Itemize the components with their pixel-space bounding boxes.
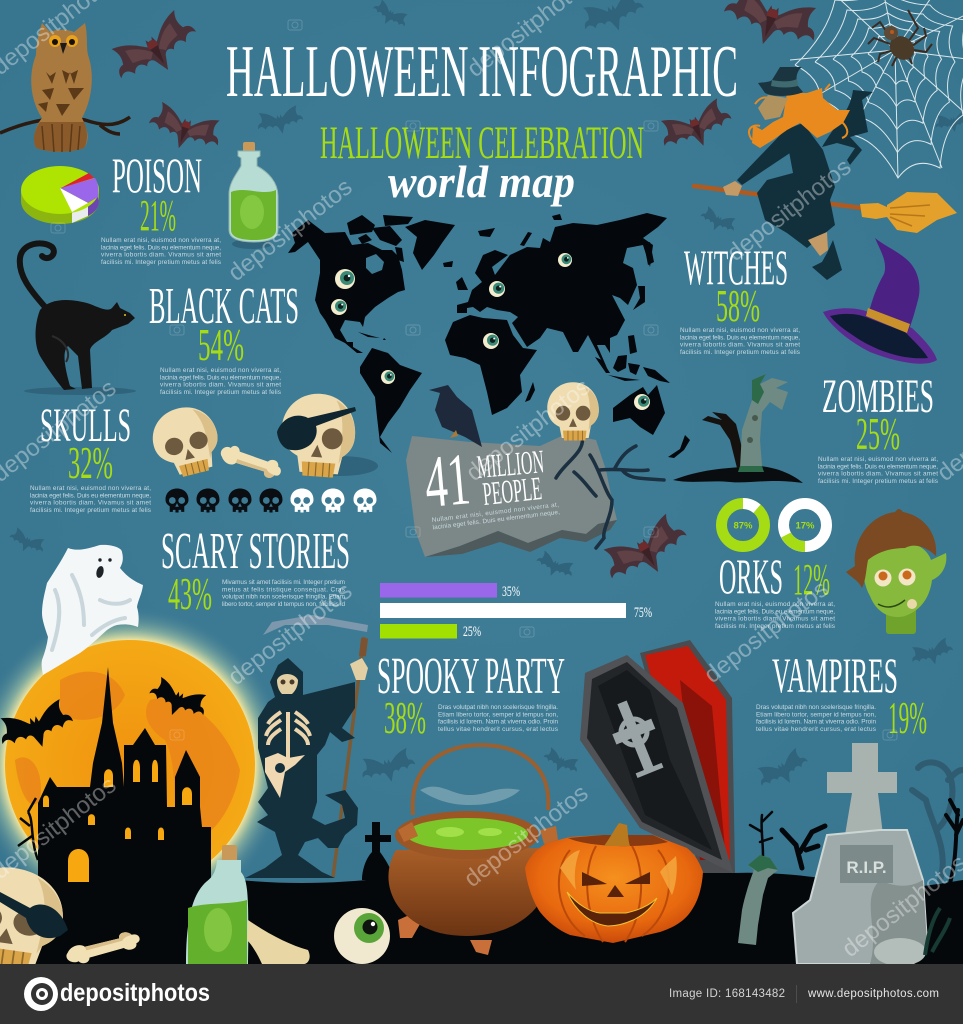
map: Africa <box>445 315 537 415</box>
scythe grip <box>359 638 368 656</box>
text block: volutpat nibh non scelerisque fringilla. Etiam <box>222 594 345 601</box>
text block: Mivamus sit amet facilisis mi. Integer pretium <box>222 579 345 586</box>
text block: metus at felis tristique consequat. Cras <box>222 586 345 593</box>
text block: lacinia eget felis. Duis eu elementum neque, <box>818 463 938 470</box>
text block: viverra lobortis diam. Vivamus sit amet <box>680 342 800 349</box>
subtitle: world map: world map <box>388 156 575 207</box>
map: New Zealand <box>668 435 690 458</box>
text block <box>222 579 345 608</box>
bar: 75% <box>380 603 626 618</box>
text block: Dras volutpat nibh non scelerisque fringilla. <box>438 704 558 711</box>
stone <box>406 434 617 557</box>
text block: viverra lobortis diam. Vivamus sit amet <box>818 471 938 478</box>
section: skulls <box>30 399 151 514</box>
donut chart: 87% <box>722 504 764 546</box>
text block: libero tortor, semper id tempus non, facilisis id <box>222 601 345 608</box>
icon: raven <box>429 385 482 447</box>
icon row: seven skulls <box>166 489 376 512</box>
icon: rip tombstone <box>793 743 950 966</box>
icon: black cat <box>20 243 136 395</box>
text block: facilisis mi. Integer pretium metus at felis <box>30 507 151 514</box>
text block: facilisis mi. Integer pretium metus at felis <box>101 259 221 266</box>
icon: witch on broom <box>694 67 957 280</box>
cauldron handle <box>413 745 548 815</box>
reaper face <box>277 674 298 694</box>
section: witches <box>680 239 800 356</box>
percent: 25%: 25% <box>856 409 900 459</box>
broom binding <box>860 203 887 219</box>
witch boot <box>812 240 842 280</box>
brown bats <box>106 0 823 593</box>
scythe blade <box>263 615 368 635</box>
footer bar <box>0 964 963 1024</box>
watermarks: depositphotos <box>223 577 357 691</box>
icon: dead trees <box>750 762 963 890</box>
text block <box>101 237 221 266</box>
map: Eurasia <box>457 213 667 368</box>
reaper cloak <box>245 658 358 878</box>
world map <box>288 213 690 458</box>
text: BLACK CATS <box>149 278 299 335</box>
icon: skull with eye patch <box>0 861 69 973</box>
text block: viverra lobortis diam. Vivamus sit amet <box>30 500 151 507</box>
watermarks: depositphotos <box>223 173 357 287</box>
map: Hudson Bay <box>366 254 384 274</box>
witch body and skirt <box>757 123 835 248</box>
section: witches: WITCHES <box>684 239 788 295</box>
section: orks: 12% <box>793 555 830 604</box>
text block: Dras volutpat nibh non scelerisque fringilla. <box>756 704 876 711</box>
map: Svalbard and Novaya Zemlya <box>478 214 562 246</box>
pumpkin top shade <box>568 835 668 846</box>
text block <box>715 601 835 630</box>
scythe pole <box>333 637 364 877</box>
broom bristles <box>887 192 957 233</box>
text block: lacinia eget felis. Duis eu elementum neque, <box>101 244 221 251</box>
witch hair <box>752 88 850 148</box>
section: poison: 21% <box>140 191 176 240</box>
tombstone body <box>793 830 927 964</box>
text block: viverra lobortis diam. Vivamus sit amet <box>715 616 835 623</box>
stone at base <box>874 938 926 966</box>
icon: skull on stone <box>547 382 599 441</box>
pumpkin body <box>525 835 703 943</box>
text block: Nullam erat nisi, euismod non viverra at, <box>30 485 151 492</box>
icon: zombie hands rising <box>673 374 803 483</box>
pumpkin eyes <box>582 872 650 886</box>
bar: 25% <box>380 624 457 638</box>
tombstone cross <box>827 743 897 835</box>
heading: skulls: SKULLS <box>40 399 131 452</box>
tombstone label: r.i.p.: R.I.P. <box>846 858 887 877</box>
percent: 54%: 54% <box>198 319 244 370</box>
section: poison <box>101 147 221 266</box>
reaper pelvis <box>265 753 305 798</box>
watermark camera marks <box>51 20 897 740</box>
text block: Nullam erat nisi, euismod non viverra at, <box>101 237 221 244</box>
witch face <box>758 95 788 120</box>
icon: zombie hand <box>738 855 778 945</box>
pumpkin ribs <box>559 846 669 942</box>
map: South America <box>360 348 422 453</box>
map: Madagascar <box>525 382 535 402</box>
cauldron rim <box>395 811 539 859</box>
text block: lacinia eget felis. Duis eu elementum neque, <box>680 334 800 341</box>
percent: 32%: 32% <box>68 437 113 488</box>
icon: bone on ground <box>247 920 310 964</box>
icon: potion bottle <box>229 142 278 249</box>
icon: dead tree <box>556 436 664 548</box>
text block: Etiam libero tortor, semper id tempus non, <box>756 711 876 718</box>
text block: Nullam erat nisi, euismod non viverra at, <box>818 456 938 463</box>
cauldron steam <box>420 787 520 805</box>
icon: ghost <box>42 545 143 675</box>
map: Greenland <box>405 220 455 270</box>
text block: facilisis mi. Integer pretium metus at felis <box>680 349 800 356</box>
logo <box>24 977 58 1011</box>
section: vampires <box>756 647 927 743</box>
text block: facilisis mi. Integer pretium metus at felis <box>818 478 938 485</box>
section: orks: ORKS <box>719 548 783 604</box>
brand name: depositphotos <box>60 979 210 1007</box>
icon: small dead tree by castle <box>18 798 38 860</box>
donut chart: 87%: 87% <box>733 520 753 532</box>
witch skin on leg <box>808 232 828 256</box>
icon: potion bottle on ground <box>186 845 248 964</box>
text block <box>160 367 281 396</box>
cauldron body <box>388 848 546 936</box>
map: North America <box>288 220 405 353</box>
panel: 41 million people stone: MILLION <box>476 444 546 486</box>
icon: owl on branch <box>0 23 130 152</box>
icon: skulls and bone <box>146 391 378 482</box>
pumpkin nose <box>607 885 624 897</box>
section: spooky party <box>377 648 565 743</box>
bar chart: 35% <box>502 584 520 600</box>
witch hand <box>723 181 742 196</box>
text block: tellus vitae hendrerit cursus, erat lectus <box>756 726 876 733</box>
icon: grim reaper <box>245 615 368 878</box>
text block: lacinia eget felis. Duis eu elementum neque, <box>160 374 281 381</box>
text block: tellus vitae hendrerit cursus, erat lectus <box>438 726 558 733</box>
text block: lacinia eget felis. Duis eu elementum neque, <box>715 608 835 615</box>
pumpkin stem <box>604 823 630 846</box>
section: black cats <box>149 278 299 396</box>
text: SPOOKY PARTY <box>377 648 565 705</box>
text block: Nullam erat nisi, euismod non viverra at, <box>680 327 800 334</box>
stone label: people: PEOPLE <box>481 471 544 513</box>
text: SCARY STORIES <box>161 523 350 580</box>
broomstick <box>694 186 862 208</box>
web: spider web <box>790 0 963 178</box>
cauldron side lugs <box>398 822 558 844</box>
witch hat <box>758 67 803 96</box>
icon: cauldron <box>388 745 558 955</box>
text block: Etiam libero tortor, semper id tempus non, <box>438 711 558 718</box>
tombstone plaque <box>840 845 893 883</box>
map: Indonesia islands <box>595 335 670 383</box>
map: British Isles <box>456 277 468 290</box>
text block: lacinia eget felis. Duis eu elementum neque, <box>30 492 151 499</box>
coffin cross <box>603 694 670 781</box>
map: Australia <box>613 385 665 435</box>
bar: 35% <box>380 583 497 598</box>
donut chart: 17% <box>784 504 826 546</box>
weeds <box>925 908 950 955</box>
percent: 43%: 43% <box>168 568 212 619</box>
moon bats <box>0 675 211 758</box>
text block: viverra lobortis diam. Vivamus sit amet <box>101 252 221 259</box>
icon: crossed bone <box>66 932 140 963</box>
ground <box>0 872 963 964</box>
silhouette bats <box>6 0 963 795</box>
bar chart <box>380 583 652 640</box>
map: Iceland <box>443 261 453 267</box>
moon <box>0 600 295 930</box>
text block: facilisis mi. Integer pretium metus at felis <box>715 623 835 630</box>
map: Caribbean <box>358 332 386 340</box>
text block: Nullam erat nisi, euismod non viverra at, <box>160 367 281 374</box>
text block <box>438 704 558 733</box>
bar chart: 25% <box>463 624 481 640</box>
text block: facilisis id lorem. Nam at viverra odio. Proin <box>756 719 876 726</box>
map: Japan and Sakhalin <box>633 242 654 310</box>
text block: Nullam erat nisi, euismod non viverra at, <box>715 601 835 608</box>
watermarks: depositphotos <box>461 373 595 487</box>
text block <box>756 704 876 733</box>
reaper ribs <box>266 712 310 758</box>
icon: green ork head <box>846 509 946 634</box>
text block: facilisis id lorem. Nam at viverra odio. Proin <box>438 719 558 726</box>
pumpkin highlights <box>560 850 677 895</box>
icon: jack-o-lantern pumpkin <box>525 823 703 943</box>
reaper hand <box>350 658 368 680</box>
witch arm <box>737 130 790 185</box>
section: spooky party: 38% <box>384 692 426 743</box>
coffin base <box>640 640 735 873</box>
witch cape <box>822 90 873 165</box>
stone number: 41: 41 <box>421 438 473 524</box>
text block: viverra lobortis diam. Vivamus sit amet <box>160 382 281 389</box>
image id: Image ID: 168143482 <box>669 988 785 1000</box>
cauldron potion <box>406 818 528 850</box>
icon: purple witch hat <box>823 238 937 364</box>
pumpkin mouth <box>567 892 657 926</box>
map eyeball markers <box>331 253 650 410</box>
icon: coffin <box>580 640 735 873</box>
watermarks: depositphotos <box>699 575 833 689</box>
bar chart: 75% <box>634 605 652 621</box>
section: poison: POISON <box>112 147 202 203</box>
footer url: www.depositphotos.com <box>807 988 939 1000</box>
text block <box>680 327 800 356</box>
text block <box>818 456 938 485</box>
donut chart: 17%: 17% <box>795 520 815 532</box>
section: scary stories <box>161 523 350 619</box>
pie chart <box>21 166 99 224</box>
footer divider <box>796 985 797 1003</box>
stone text: Nullam erat nisi, euismod non viverra at, <box>431 501 560 524</box>
stone text: lacinia eget felis. Duis eu elementum neque, <box>432 509 560 531</box>
subtitle: Halloween Celebration: HALLOWEEN CELEBRATION <box>320 117 644 169</box>
icon: castle <box>38 667 211 964</box>
section: zombies <box>818 370 938 485</box>
map: Arctic islands <box>347 215 413 262</box>
cauldron legs <box>398 912 492 955</box>
icon: eyeball <box>334 908 390 964</box>
watermarks: depositphotos <box>459 779 593 893</box>
panel: 41 million people stone <box>406 434 664 557</box>
coffin lid <box>580 655 733 873</box>
text block: facilisis mi. Integer pretium metus at felis <box>160 389 281 396</box>
section: orks <box>715 548 835 630</box>
icon: cross silhouette <box>362 822 394 880</box>
percent: 58%: 58% <box>716 281 760 331</box>
text block <box>30 485 151 514</box>
watermarks: depositphotos <box>722 153 856 267</box>
icon: spider <box>868 10 932 66</box>
